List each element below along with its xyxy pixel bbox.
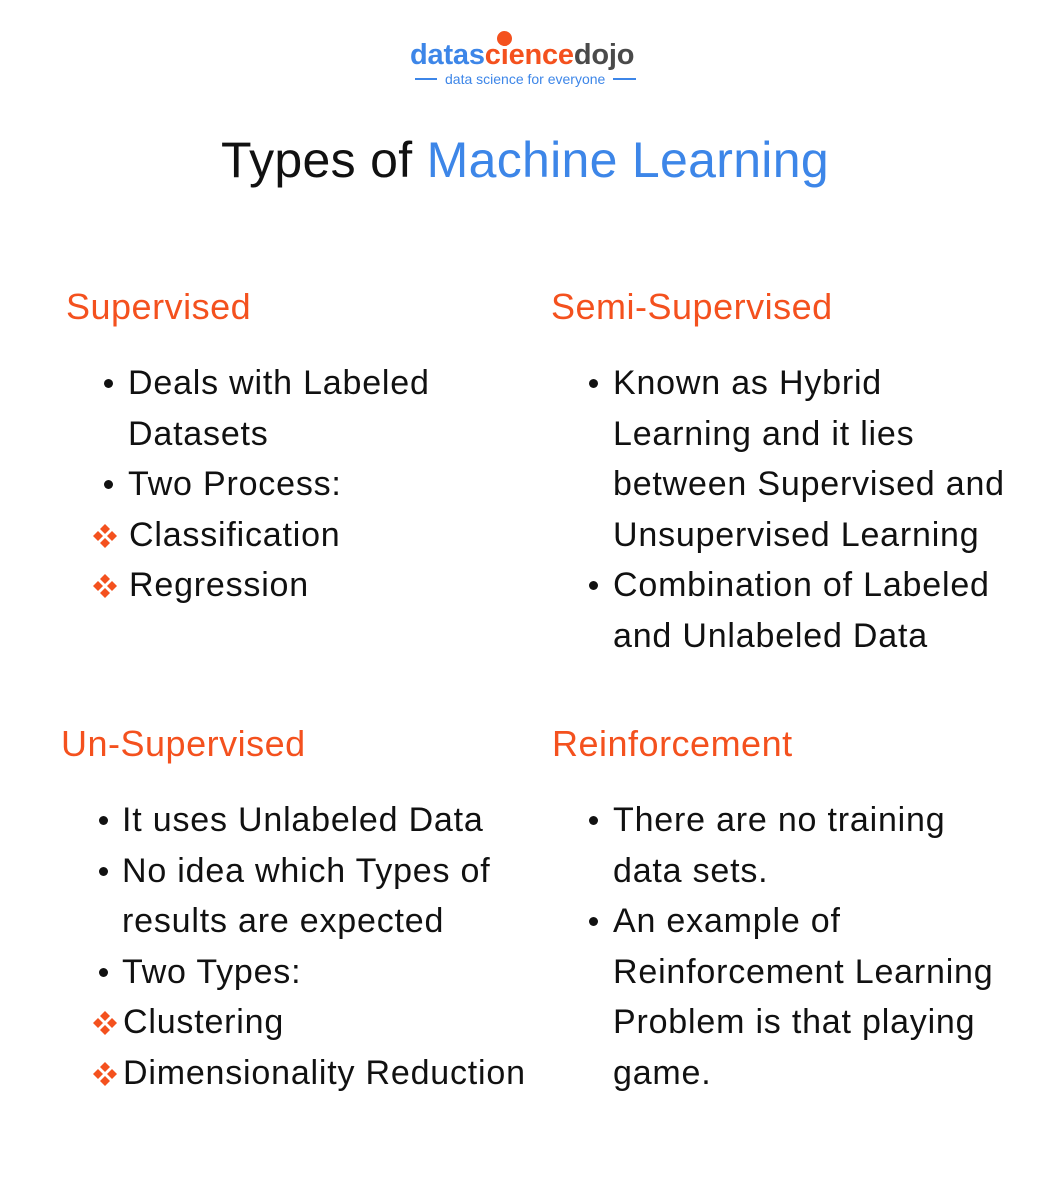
heading: semi-supervised: Semi-Supervised [551, 286, 833, 327]
logo wordmark: datasciencedojo [410, 39, 634, 71]
un-supervised bullets: Dimensionality Reduction [123, 1054, 526, 1092]
panel: supervised [66, 286, 430, 604]
supervised bullets: Regression [129, 566, 309, 604]
reinforcement bullets: There are no training [613, 801, 945, 839]
reinforcement bullets [589, 801, 993, 1092]
semi-supervised bullets: between Supervised and [613, 465, 1005, 503]
panel: un-supervised [61, 723, 526, 1092]
un-supervised bullets: No idea which Types of [122, 852, 491, 890]
semi-supervised bullets: and Unlabeled Data [613, 616, 928, 654]
semi-supervised bullets: Unsupervised Learning [613, 516, 979, 554]
supervised bullets: Classification [129, 516, 340, 554]
supervised bullets: Deals with Labeled [128, 364, 430, 402]
supervised bullets [93, 364, 430, 604]
un-supervised bullets: Clustering [123, 1003, 284, 1041]
semi-supervised bullets: Known as Hybrid [613, 364, 882, 402]
heading: reinforcement: Reinforcement [552, 723, 793, 764]
semi-supervised bullets: Combination of Labeled [613, 566, 990, 604]
un-supervised bullets [93, 801, 526, 1092]
logo tagline: data science for everyone [445, 71, 605, 87]
reinforcement bullets: Problem is that playing [613, 1003, 975, 1041]
semi-supervised bullets: Learning and it lies [613, 414, 914, 452]
supervised bullets: Datasets [128, 414, 269, 452]
un-supervised bullets: results are expected [122, 902, 444, 940]
semi-supervised bullets [589, 364, 1005, 654]
heading: un-supervised: Un-Supervised [61, 723, 306, 764]
reinforcement bullets: An example of [613, 902, 841, 940]
un-supervised bullets: Two Types: [122, 952, 301, 990]
un-supervised bullets: It uses Unlabeled Data [122, 801, 484, 839]
reinforcement bullets: Reinforcement Learning [613, 952, 993, 990]
title: Types of Machine Learning [221, 132, 829, 188]
heading: supervised: Supervised [66, 286, 251, 327]
logo [410, 31, 636, 87]
reinforcement bullets: game. [613, 1054, 712, 1092]
reinforcement bullets: data sets. [613, 852, 768, 890]
supervised bullets: Two Process: [128, 465, 342, 503]
panel: reinforcement [552, 723, 993, 1092]
panel: semi-supervised [551, 286, 1005, 654]
